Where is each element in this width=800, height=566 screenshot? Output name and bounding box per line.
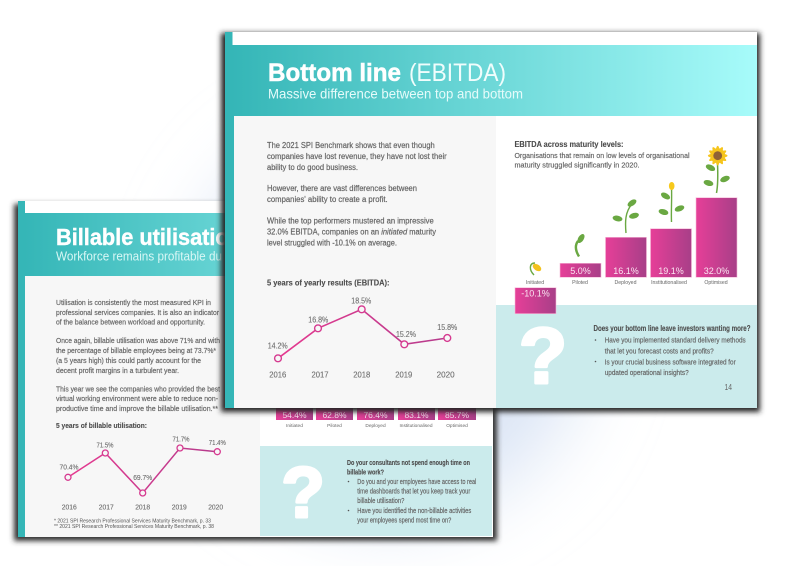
back bar chart: Deployed [365,423,386,429]
icon: budding plant [658,182,685,222]
front page sheet [225,32,757,408]
line chart: yearly EBITDA: 2016 [269,370,287,380]
front page shadow [221,33,760,412]
back question text: Do you and your employees have access to real [357,477,477,486]
line chart: billable utilisation: 71.7% [172,436,190,444]
line chart: billable utilisation [60,436,226,512]
footnotes: ** 2021 SPI Research Professional Services Maturity Benchmark, p. 38 [54,524,214,530]
back body text: virtual working environment were able to reduce non- [56,394,218,403]
maturity heading: EBITDA across maturity levels: [514,140,624,149]
background glow [190,120,590,520]
back bar chart: Institutionalised [399,423,433,429]
question panel [496,305,757,408]
back body text: This year we see the companies who provided the best [56,384,220,394]
line chart: yearly EBITDA: 15.8% [437,323,457,332]
line chart: billable utilisation: 71.5% [96,442,114,450]
back question text: billable work? [347,468,384,476]
body text: While the top performers mustered an impressive [267,216,434,226]
line chart: billable utilisation: 2017 [99,504,114,512]
maturity description: Organisations that remain on low levels of organisational [514,151,690,160]
line chart: billable utilisation: 2019 [172,504,187,512]
back body text: productive time and improve the billable utilisation.** [56,404,218,413]
body text: companies' ability to create a profit. [267,195,388,204]
panel: front page bottom line [221,32,760,412]
line chart: yearly EBITDA: 2017 [312,370,329,380]
back bar chart: 85.7% [445,410,469,420]
bar chart: EBITDA across maturity levels: 16.1% [613,266,639,276]
body text: The 2021 SPI Benchmark shows that even though [267,141,435,150]
back question text [347,458,477,524]
back bar chart: 62.8% [322,410,347,420]
line chart: yearly EBITDA: 2019 [395,370,413,380]
question text: Does your bottom line leave investors wanting more? [594,324,751,333]
line chart: yearly EBITDA: 18.5% [351,296,371,306]
back question text: your employees spend most time on? [357,516,451,524]
line chart: billable utilisation: 70.4% [60,464,78,472]
line chart: yearly EBITDA [268,296,457,380]
subtitle: Massive difference between top and bottom [268,86,523,102]
back question text: Have you identified the non-billable activities [357,506,472,515]
bar chart: EBITDA across maturity levels: 32.0% [704,266,729,276]
panel: back page billable utilisation [14,201,497,541]
back body text [56,298,220,413]
back bar chart: Piloted [327,423,342,429]
maturity description [514,151,690,170]
question text: that let you forecast costs and profits? [605,346,714,356]
icon: sprout [576,233,586,256]
back bar chart: 83.1% [404,410,429,420]
body text: However, there are vast differences between [267,184,417,193]
title [268,59,506,87]
back bar chart: Initiated [286,423,303,429]
bar chart: EBITDA across maturity levels: 5.0% [570,266,591,276]
back chart heading: 5 years of billable utilisation: [56,421,147,430]
body text: ability to do good business. [267,163,358,172]
chart heading: 5 years of yearly results (EBITDA): [267,278,390,288]
back bar chart: 54.4% [282,410,307,420]
page number: 14 [724,383,732,392]
icon: question mark: ? [519,311,567,400]
line chart: yearly EBITDA: 16.8% [308,316,328,324]
bar chart: EBITDA across maturity levels: Initiated [526,280,544,286]
back title: Billable utilisation [56,224,242,250]
bar chart: EBITDA across maturity levels: Optimised [704,280,728,286]
bar chart: EBITDA across maturity levels: Piloted [572,280,588,286]
back body text: professional services companies. It is also an indicator [56,308,219,317]
line chart: billable utilisation: 2018 [135,504,150,512]
line chart: billable utilisation: 69.7% [133,475,152,482]
back body text: of the balance between workload and opportunity. [56,318,205,326]
bar chart: EBITDA across maturity levels: -10.1% [521,288,550,298]
icon: back question mark: ? [281,454,325,533]
body text: companies have lost revenue, they have not lost their [267,152,447,161]
back body text: decent profit margins in a turbulent year. [56,366,179,375]
back question text: time dashboards that let you keep track your [357,486,471,496]
line chart: yearly EBITDA: 14.2% [268,342,288,350]
back body text: (a 5 years high) this could partly account for the [56,356,201,365]
back body text: Once again, billable utilisation was above 71% and with [56,336,220,345]
back subtitle: Workforce remains profitable du [56,250,222,264]
maturity description: maturity struggled significantly in 2020. [514,160,640,170]
title: Bottom line [268,59,401,87]
question text: Have you implemented standard delivery methods [605,336,746,344]
back question panel [260,446,492,536]
back page sheet [18,201,493,537]
icon: young plant [612,198,640,233]
line chart: billable utilisation: 2020 [208,504,223,512]
back bar chart [276,400,476,429]
back body text: Utilisation is consistently the most measured KPI in [56,298,211,307]
bar chart: EBITDA across maturity levels: 19.1% [658,266,684,276]
back bar chart: 76.4% [363,410,388,420]
footnotes [54,518,214,530]
front header band [225,45,757,116]
line chart: yearly EBITDA: 2018 [353,370,371,380]
line chart: billable utilisation: 2016 [62,504,77,512]
bar chart: EBITDA across maturity levels: Institutionalised [651,280,687,286]
bar chart: EBITDA across maturity levels: Deployed [615,280,637,286]
back body text: the percentage of billable employees being at 73.7%* [56,346,216,355]
icon: sunflower [703,146,731,193]
back question text: Do your consultants not spend enough time on [347,458,470,467]
bar chart: EBITDA across maturity levels [515,198,737,314]
question text: Is your crucial business software integrated for [605,358,736,366]
back page shadow [14,204,497,541]
line chart: billable utilisation: 71.4% [209,440,226,447]
body text: 32.0% EBITDA, companies on an initiated maturity [267,228,436,236]
footnotes: * 2021 SPI Research Professional Services Maturity Benchmark, p. 33 [54,518,211,524]
body text [267,141,447,248]
question text: updated operational insights? [605,368,689,377]
back header band [18,213,493,276]
line chart: yearly EBITDA: 2020 [437,370,455,380]
line chart: yearly EBITDA: 15.2% [396,330,416,339]
body text: level struggled with -10.1% on average. [267,238,397,248]
question text [594,324,751,377]
icon: seed [530,262,543,275]
back bar chart: Optimised [446,423,468,429]
title: (EBITDA) [409,59,506,87]
back question text: billable utilisation? [357,496,404,505]
